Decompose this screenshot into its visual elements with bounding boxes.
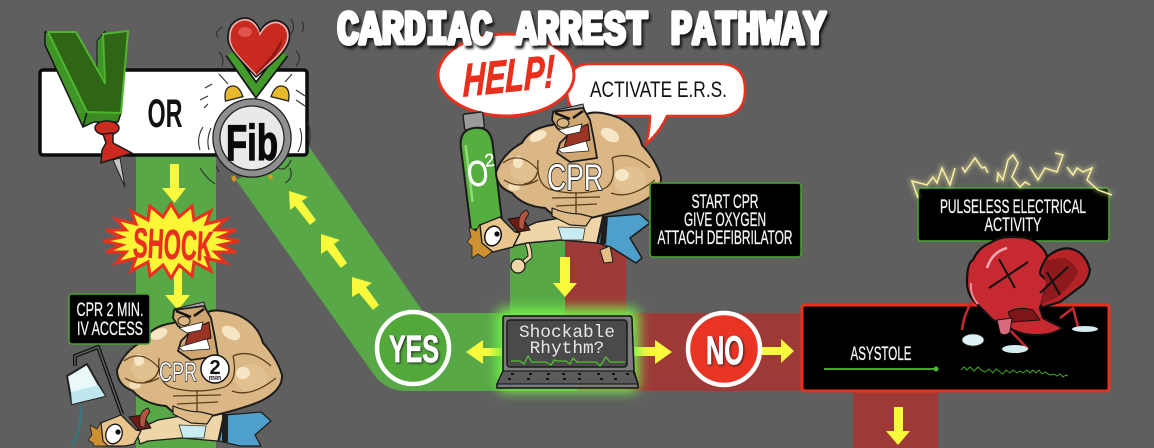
box: asystole: ASYSTOLE	[850, 344, 912, 365]
path band: green V-Fib column	[136, 155, 216, 448]
electric sparks	[912, 153, 1112, 198]
PEA trace	[961, 367, 1068, 377]
note: CPR 2 min, IV access: CPR 2 MIN.	[76, 300, 144, 321]
node: no	[688, 313, 760, 385]
label: cpr 2 min: min	[209, 375, 221, 382]
arrow: diagonal up one	[289, 191, 316, 225]
note: start CPR	[650, 183, 801, 257]
icon: oxygen tank: 2	[483, 150, 496, 171]
laptop: shockable rhythm: Rhythm?	[530, 339, 604, 359]
arrow: down from shock	[165, 268, 190, 310]
note: pulseless electrical activity	[918, 188, 1109, 241]
title: CARDIAC ARREST PATHWAY	[337, 5, 826, 58]
laptop: shockable rhythm	[497, 308, 639, 392]
icon: oxygen tank	[457, 111, 503, 230]
laptop: shockable rhythm: Shockable	[519, 323, 615, 343]
label: fib: Fib	[226, 115, 278, 171]
icon: oxygen tank: O	[465, 152, 491, 195]
path band: green column to rhythm check	[510, 230, 565, 320]
note: start CPR: ATTACH DEFIBRILATOR	[658, 228, 792, 249]
burst: shock: SHOCK	[132, 219, 214, 270]
note: CPR 2 min, IV access	[69, 294, 150, 344]
burst: shock	[103, 204, 239, 278]
label: cpr chest: CPR	[547, 157, 603, 198]
node: yes	[377, 312, 449, 384]
arrow: right to asystole	[762, 339, 794, 363]
arrow: left to yes	[466, 340, 504, 364]
arrow: diagonal up two	[321, 234, 347, 268]
icon: collapsed heart	[962, 237, 1098, 353]
arrow: down to rhythm check	[553, 257, 577, 297]
box: asystole	[802, 305, 1109, 391]
speech bubble: help: HELP!	[463, 45, 555, 107]
path band: red horizontal to asystole	[577, 313, 807, 391]
speech bubble: activate E.R.S.: ACTIVATE E.R.S.	[590, 77, 727, 102]
arrow: diagonal up three	[352, 277, 379, 310]
label: cpr 2 min: 2	[209, 357, 221, 379]
note: pulseless electrical activity: ACTIVITY	[984, 215, 1042, 236]
label: cpr 2 min: CPR	[159, 357, 197, 387]
icon: letter V with pin	[45, 31, 132, 187]
node: no: NO	[706, 329, 744, 373]
note: start CPR: GIVE OXYGEN	[684, 210, 766, 231]
figure: rescuer performing CPR on patient	[467, 104, 661, 273]
icon: IV bag	[67, 347, 122, 445]
note: start CPR: START CPR	[692, 192, 758, 213]
arrow: right to no	[630, 340, 672, 364]
arrow: down from asystole	[886, 407, 910, 445]
path band: red column down	[853, 392, 938, 448]
note: CPR 2 min, IV access: IV ACCESS	[77, 319, 143, 340]
sign: V or Fib	[40, 70, 307, 155]
figure: rescuer CPR 2 min on patient	[88, 302, 282, 446]
icon: alarm clock with heart	[199, 18, 310, 184]
speech bubble: help	[438, 34, 574, 116]
path band: green diagonal return to V/Fib	[236, 148, 580, 391]
arrow: down from rhythm sign	[162, 164, 186, 203]
node: yes: YES	[389, 329, 439, 371]
speech bubble: activate E.R.S.	[567, 64, 745, 144]
path band: red column to rhythm check	[565, 230, 626, 320]
label: or: OR	[148, 92, 183, 136]
flat line trace	[824, 368, 936, 370]
